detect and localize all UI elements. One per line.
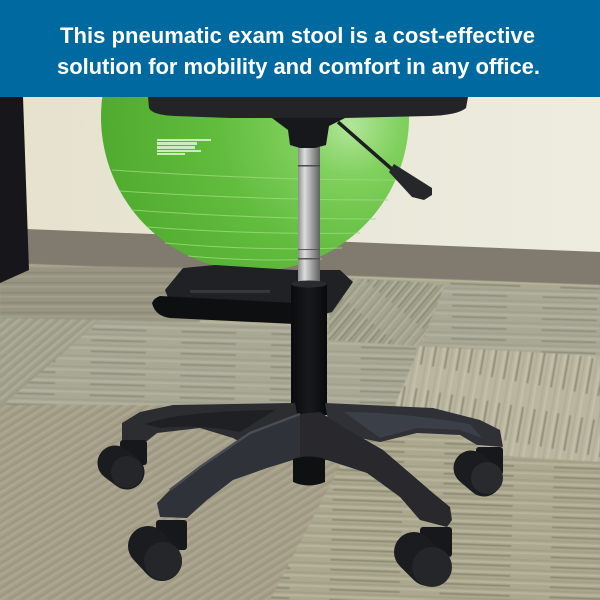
front left arm highlight: [170, 414, 300, 490]
rear left arm: [122, 403, 300, 442]
seat cushion: [148, 97, 468, 118]
front right arm: [300, 412, 452, 527]
ball label: [157, 139, 211, 155]
carpet floor: [0, 263, 600, 600]
stool column: [291, 280, 327, 415]
chrome gas cylinder: [298, 147, 320, 285]
caster: front left: [144, 520, 187, 580]
black side cabinet: [0, 97, 29, 283]
ball stripes: [112, 170, 398, 260]
green exercise ball: [101, 0, 409, 271]
caster: rear right: [471, 447, 503, 494]
caster: front right: [412, 527, 452, 587]
lower post: [293, 456, 325, 486]
black mat under ball: [152, 265, 353, 324]
height lever: [338, 122, 432, 200]
headline text: [57, 23, 540, 79]
caster: rear left: [111, 440, 147, 488]
rear right arm: [325, 403, 503, 447]
headline text: This pneumatic exam stool is a cost-effective: [60, 23, 535, 48]
front left arm: [157, 414, 320, 518]
wall: [0, 97, 600, 257]
seat hub: [272, 118, 345, 148]
baseboard: [26, 229, 600, 287]
header banner: [0, 0, 600, 97]
headline text: solution for mobility and comfort in any office.: [57, 54, 540, 79]
five-star base: [122, 403, 503, 527]
